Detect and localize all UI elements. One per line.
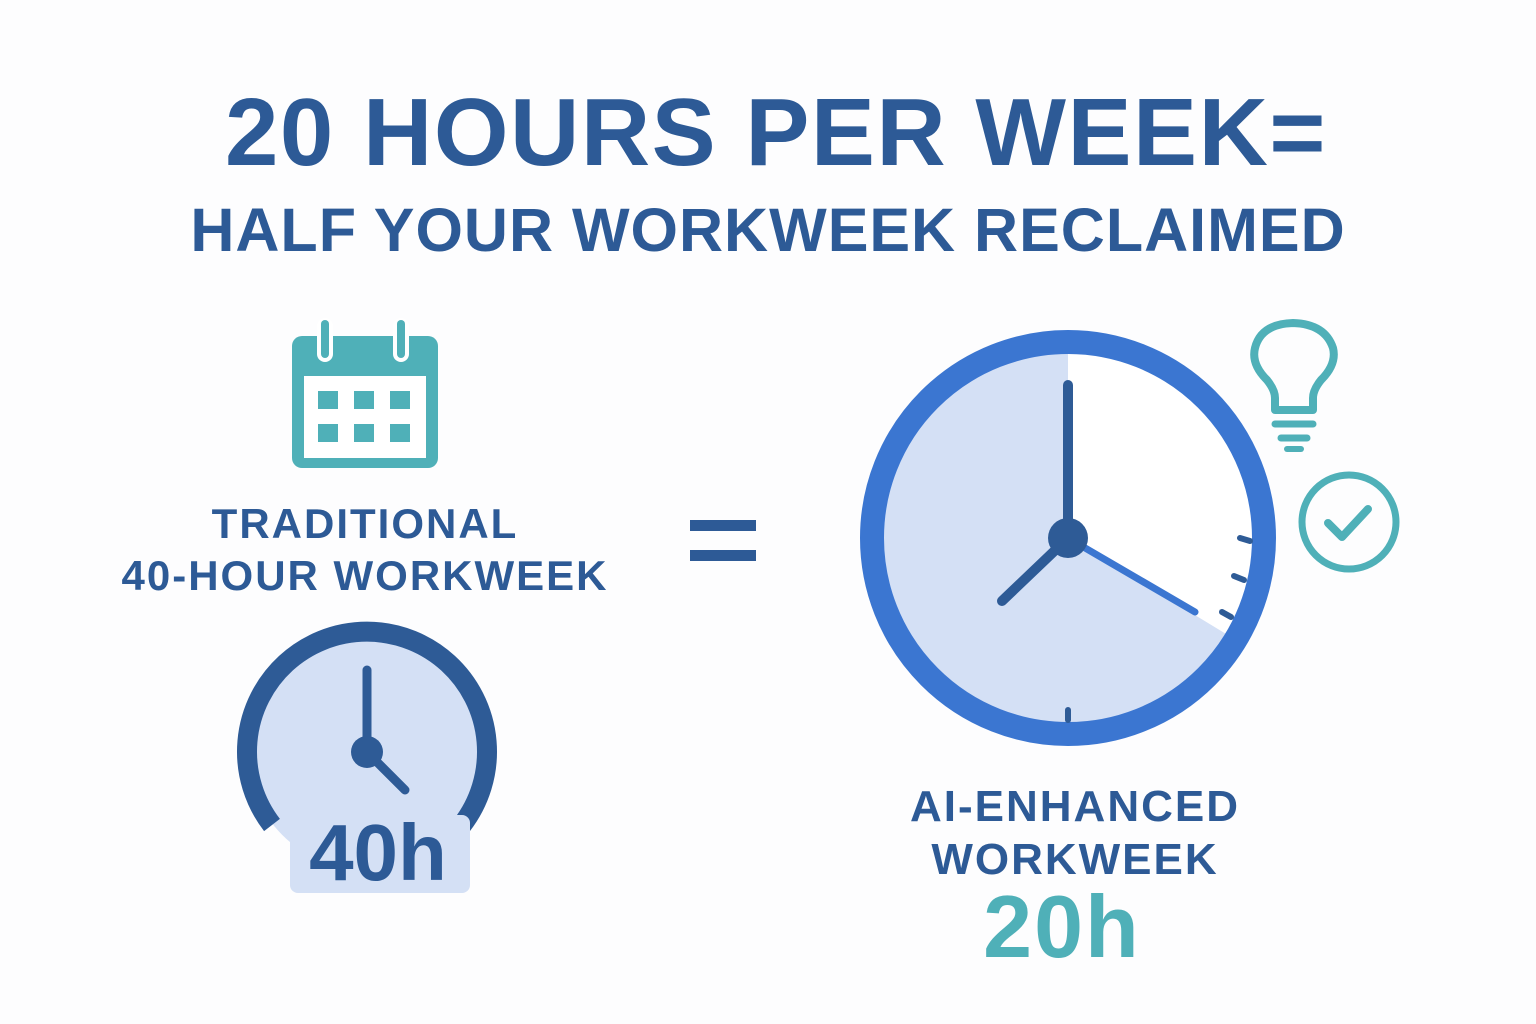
title line 1: 20 HOURS PER WEEK= — [225, 79, 1327, 186]
label: AI-enhanced workweek: WORKWEEK — [931, 835, 1219, 884]
icon: calendar — [292, 320, 438, 468]
small clock 40h — [237, 622, 497, 897]
label: traditional workweek: 40-HOUR WORKWEEK — [121, 552, 608, 599]
icon: check circle — [1298, 472, 1400, 572]
label: traditional workweek — [121, 500, 608, 599]
icon: lightbulb — [1250, 319, 1338, 452]
value: 20h: 20h — [983, 877, 1141, 976]
big clock — [860, 330, 1276, 746]
equals sign — [690, 520, 756, 561]
label: traditional workweek: TRADITIONAL — [212, 500, 518, 547]
title line 2: HALF YOUR WORKWEEK RECLAIMED — [190, 196, 1346, 264]
small clock 40h: 40h — [309, 808, 447, 897]
label: AI-enhanced workweek — [910, 782, 1240, 884]
label: AI-enhanced workweek: AI-ENHANCED — [910, 782, 1240, 831]
